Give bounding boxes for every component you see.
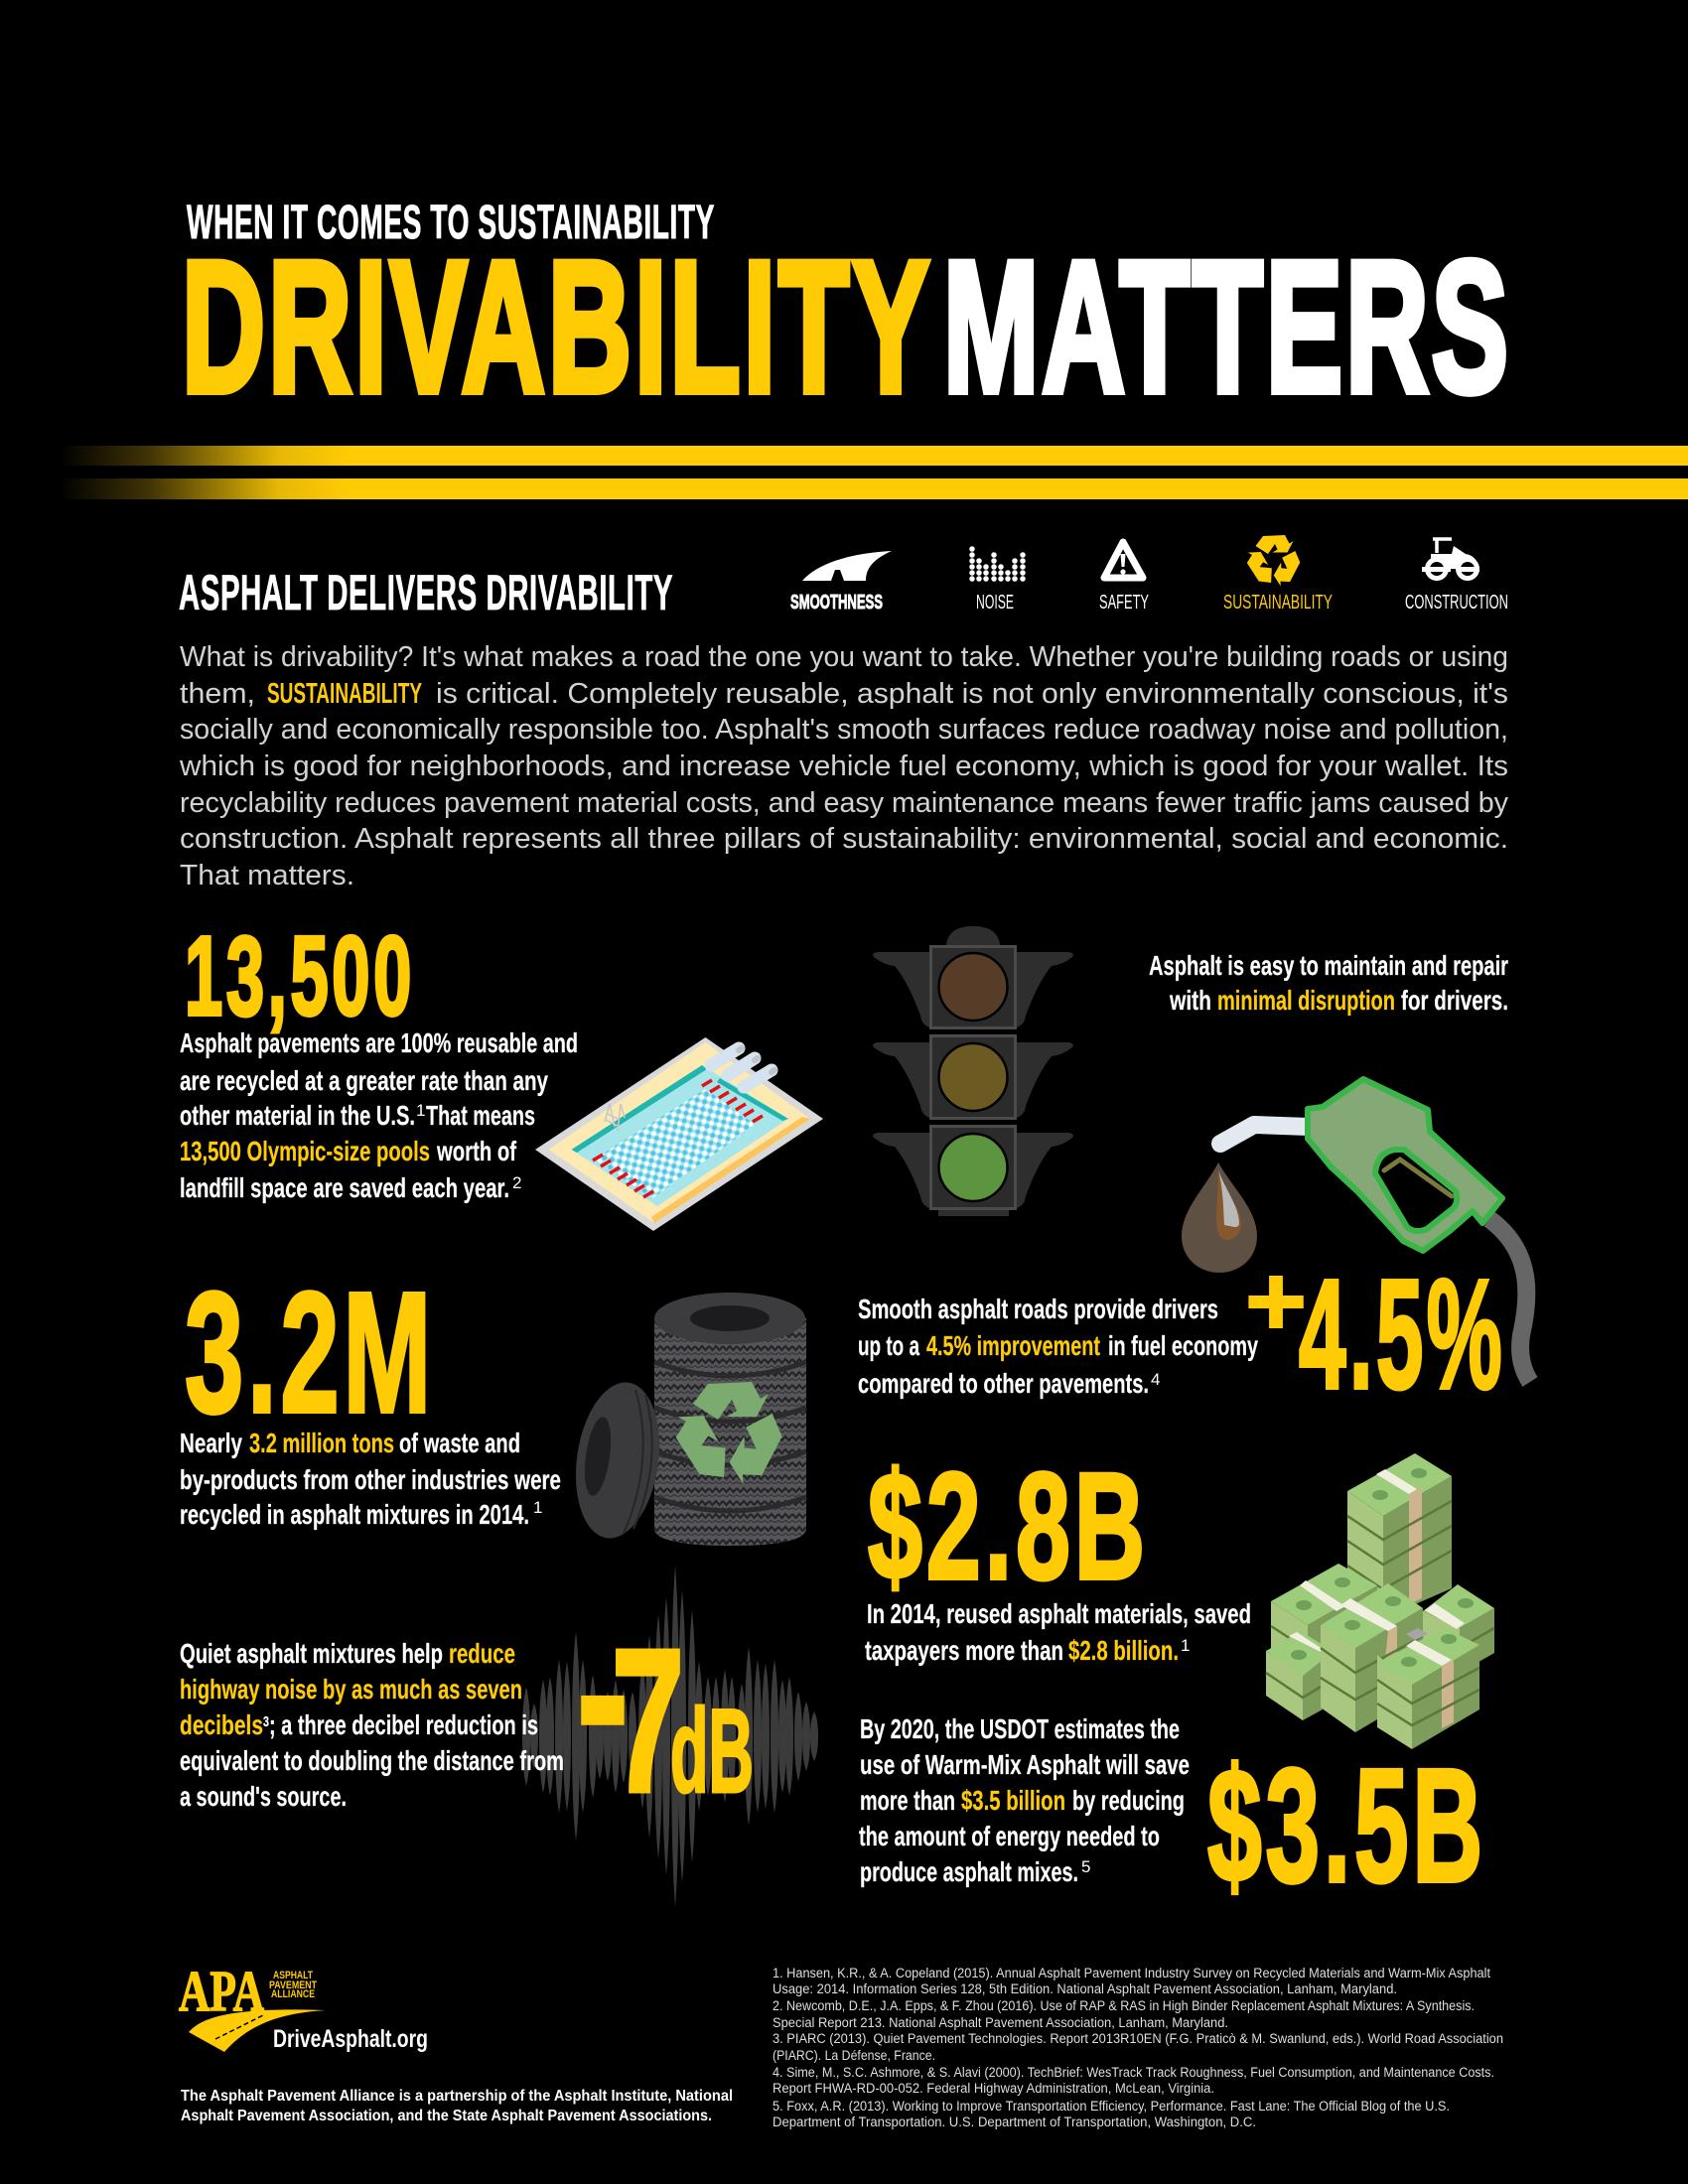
icon: money stacks [1266, 1453, 1494, 1749]
logo: asphalt pavement alliance: ASPHALT [273, 1970, 313, 1981]
text: taxpayers saved: taxpayers more than [865, 1635, 1063, 1666]
logo: asphalt pavement alliance [179, 1959, 428, 2053]
text: recycled pools: landfill space are saved each year. [180, 1172, 509, 1203]
stat: 13,500 [180, 913, 578, 1203]
text: recycled pools: 1 [416, 1101, 425, 1120]
icon: sustainability: SUSTAINABILITY [1223, 592, 1333, 614]
intro paragraph: What is drivability? It's what makes a road the one you want to take. Whether you're building roads or using [180, 641, 1508, 673]
icon: green recycle symbol [667, 1382, 791, 1490]
text: quiet asphalt: reduce [449, 1638, 515, 1669]
references: (PIARC). La Défense, France. [773, 2048, 935, 2063]
text: quiet asphalt: Quiet asphalt mixtures help [180, 1638, 443, 1669]
stack: center [1321, 1583, 1423, 1732]
unit dB: dB [670, 1685, 754, 1818]
intro paragraph: recyclability reduces pavement material costs, and easy maintenance means fewer traffic jams caused by [180, 787, 1508, 819]
text: fuel economy: 4 [1151, 1370, 1160, 1389]
partnership note [181, 2088, 733, 2124]
intro paragraph: That matters. [180, 860, 354, 891]
icon: noise [972, 545, 1023, 614]
text: fuel economy: compared to other pavements. [858, 1368, 1149, 1399]
text: warm-mix savings: use of Warm-Mix Asphalt will save [860, 1749, 1190, 1780]
stack: front left [1266, 1631, 1323, 1720]
text: recycled waste [180, 1428, 561, 1530]
heading: asphalt delivers drivability: ASPHALT DELIVERS DRIVABILITY [179, 565, 673, 620]
text: recycled pools: are recycled at a greater rate than any [180, 1065, 548, 1096]
text: recycled pools: 2 [512, 1173, 521, 1192]
text: recycled waste: 3.2 million tons [249, 1428, 394, 1458]
text: taxpayers saved: In 2014, reused asphalt materials, saved [867, 1598, 1251, 1629]
icon: construction [1405, 539, 1508, 614]
partnership note: Asphalt Pavement Association, and the State Asphalt Pavement Associations. [181, 2108, 712, 2124]
logo: asphalt pavement alliance: APA [179, 1959, 264, 2023]
references: Department of Transportation. U.S. Department of Transportation, Washington, D.C. [773, 2115, 1256, 2129]
stat: $3.5B: $3.5B [1207, 1734, 1486, 1916]
icon: safety: SAFETY [1099, 592, 1149, 614]
partnership note: The Asphalt Pavement Alliance is a partnership of the Asphalt Institute, National [181, 2088, 733, 2105]
text: easy to maintain: Asphalt is easy to maintain and repair [1149, 950, 1508, 981]
text: warm-mix savings: 5 [1081, 1857, 1090, 1876]
references: Report FHWA-RD-00-052. Federal Highway Administration, McLean, Virginia. [773, 2081, 1214, 2096]
number $2.8B: $2.8B [868, 1441, 1149, 1611]
plus sign: + [1245, 1246, 1307, 1357]
intro paragraph: socially and economically responsible too. Asphalt's smooth surfaces reduce roadway noise and pollution, [180, 714, 1508, 746]
url: DriveAsphalt.org [273, 2025, 428, 2053]
text: warm-mix savings: more than [860, 1785, 955, 1816]
text: quiet asphalt: 3 [263, 1713, 269, 1730]
text: recycled waste: 1 [533, 1498, 542, 1517]
icon row [790, 535, 1508, 614]
text: recycled pools: other material in the U.S. [180, 1100, 415, 1131]
title [182, 197, 1511, 431]
text: recycled pools: That means [426, 1100, 535, 1131]
logo: asphalt pavement alliance: PAVEMENT [269, 1979, 317, 1991]
intro paragraph: which is good for neighborhoods, and increase vehicle fuel economy, which is good for your wallet. Its [179, 751, 1508, 782]
icon: safety [1099, 542, 1149, 614]
icon: noise: NOISE [976, 592, 1014, 614]
text: recycled pools: worth of [436, 1136, 516, 1166]
stat: $2.8B [865, 1441, 1251, 1666]
text: easy to maintain: for drivers. [1401, 985, 1508, 1016]
references: 1. Hansen, K.R., & A. Copeland (2015). Annual Asphalt Pavement Industry Survey on Recycled Materials and Warm-Mix Asphalt [773, 1966, 1490, 1980]
stack: tall [1347, 1453, 1452, 1618]
text: warm-mix savings: By 2020, the USDOT estimates the [860, 1713, 1180, 1744]
text: warm-mix savings: by reducing [1072, 1785, 1185, 1816]
stack: back right [1423, 1584, 1494, 1673]
text: easy to maintain: minimal disruption [1217, 985, 1395, 1016]
waveform [522, 1566, 818, 1907]
text: recycled waste: of waste and [399, 1428, 520, 1458]
icon: smoothness: SMOOTHNESS [790, 592, 883, 614]
text: quiet asphalt: ; a three decibel reduction is [269, 1709, 538, 1740]
references: Special Report 213. National Asphalt Pavement Association, Lanham, Maryland. [773, 2015, 1228, 2030]
intro paragraph: is critical. Completely reusable, asphalt is not only environmentally conscious, it's [436, 678, 1508, 710]
text: fuel economy: Smooth asphalt roads provide drivers [858, 1294, 1218, 1324]
text: taxpayers saved: 1 [1181, 1636, 1190, 1655]
references: 2. Newcomb, D.E., J.A. Epps, & F. Zhou (2016). Use of RAP & RAS in High Binder Replacement Asphalt Mixtures: A Synthesis. [773, 1998, 1475, 2013]
icon: traffic light [873, 926, 1073, 1216]
stack: front right [1377, 1628, 1479, 1749]
text: quiet asphalt [180, 1638, 564, 1812]
text: taxpayers saved [865, 1598, 1251, 1666]
text: quiet asphalt: highway noise by as much as seven [180, 1674, 522, 1705]
text: warm-mix savings: $3.5 billion [961, 1785, 1065, 1816]
logo: asphalt pavement alliance: ALLIANCE [271, 1988, 315, 2000]
number 3.2M: 3.2M [185, 1256, 435, 1448]
text: easy to maintain: with [1169, 985, 1211, 1016]
stat: 3.2M [180, 1256, 561, 1530]
intro paragraph [179, 641, 1508, 891]
references [773, 1966, 1503, 2129]
references: 4. Sime, M., S.C. Ashmore, & S. Alavi (2000). TechBrief: WesTrack Track Roughness, Fuel Consumption, and Maintenance Costs. [773, 2065, 1494, 2080]
text: quiet asphalt: a sound's source. [180, 1781, 347, 1812]
text: recycled waste: recycled in asphalt mixtures in 2014. [180, 1499, 529, 1530]
number 7: 7 [612, 1607, 684, 1835]
text: fuel economy: 4.5% improvement [926, 1330, 1100, 1361]
stack: left [1271, 1564, 1377, 1693]
icon: fuel nozzle and drop [1182, 1079, 1530, 1382]
title: kicker: WHEN IT COMES TO SUSTAINABILITY [187, 197, 715, 249]
text: warm-mix savings: the amount of energy needed to [859, 1821, 1160, 1851]
intro paragraph: them, [180, 678, 255, 710]
icon: construction: CONSTRUCTION [1405, 592, 1508, 614]
text: warm-mix savings: produce asphalt mixes. [860, 1856, 1078, 1887]
text: fuel economy: in fuel economy [1108, 1330, 1258, 1361]
stat: -7dB [577, 1577, 754, 1835]
number 13,500: 13,500 [185, 913, 415, 1038]
icon: sustainability [1223, 535, 1333, 614]
text: recycled pools [180, 1027, 578, 1203]
intro paragraph: construction. Asphalt represents all three pillars of sustainability: environmental, social and economic. [180, 823, 1508, 855]
text: taxpayers saved: $2.8 billion. [1068, 1635, 1179, 1666]
text: fuel economy [858, 1294, 1258, 1399]
icon: swimming pool [535, 1037, 823, 1231]
minus: - [577, 1577, 629, 1809]
text: recycled waste: Nearly [180, 1428, 242, 1458]
references: 5. Foxx, A.R. (2013). Working to Improve Transportation Efficiency, Performance. Fast Lane: The Official Blog of the U.S. [773, 2099, 1450, 2114]
text: fuel economy: up to a [858, 1330, 919, 1361]
text: quiet asphalt: decibels [180, 1709, 263, 1740]
text: easy to maintain [1149, 950, 1508, 1016]
text: recycled pools: Asphalt pavements are 100% reusable and [180, 1027, 578, 1058]
references: 3. PIARC (2013). Quiet Pavement Technologies. Report 2013R10EN (F.G. Praticò & M. Swanlund, eds.). World Road Association [773, 2031, 1503, 2046]
text: warm-mix savings [859, 1713, 1190, 1887]
road stripes [60, 446, 1688, 499]
title: drivability: DRIVABILITY [182, 222, 932, 431]
intro paragraph: SUSTAINABILITY [267, 678, 422, 710]
references: Usage: 2014. Information Series 128, 5th Edition. National Asphalt Pavement Association, Lanham, Maryland. [773, 1981, 1397, 1996]
icon: smoothness [790, 551, 892, 614]
text: recycled pools: 13,500 Olympic-size pools [180, 1136, 430, 1166]
number 4.5%: 4.5% [1299, 1248, 1505, 1422]
stat: +4.5% [1245, 1246, 1505, 1422]
icon: recycled tires [566, 1293, 806, 1546]
text: quiet asphalt: equivalent to doubling the distance from [180, 1745, 564, 1776]
text: recycled waste: by-products from other industries were [180, 1464, 561, 1495]
